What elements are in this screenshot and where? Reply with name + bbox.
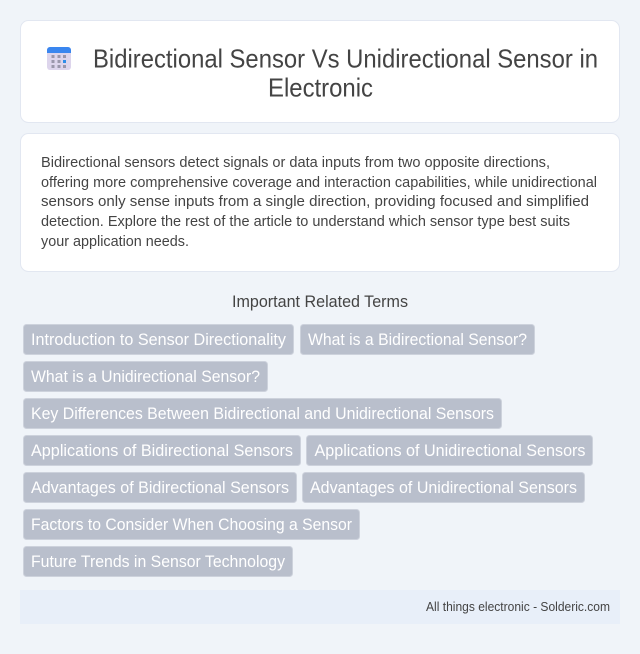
- heading: Electronic: [268, 72, 373, 102]
- tag: advantages bidirectional: Advantages of Bidirectional Sensors: [31, 478, 289, 497]
- tag: future trends: Future Trends in Sensor Technology: [31, 552, 285, 571]
- tag: what is unidirectional: [24, 362, 268, 392]
- tag: applications bidirectional: [24, 436, 300, 466]
- tag: key differences: Key Differences Between Bidirectional and Unidirectional Sensors: [31, 404, 494, 423]
- tag: what is bidirectional: What is a Bidirectional Sensor?: [308, 330, 527, 349]
- tag: applications unidirectional: [306, 436, 592, 466]
- tag: applications unidirectional: Applications of Unidirectional Sensors: [314, 441, 586, 460]
- panel: title header: [20, 20, 620, 122]
- panel: description: [20, 134, 620, 272]
- text block: description: Bidirectional sensors detect signals or data inputs from two opposite directions,: [41, 154, 550, 171]
- tag: what is bidirectional: [300, 324, 534, 354]
- tag: advantages unidirectional: Advantages of Unidirectional Sensors: [310, 478, 577, 497]
- text block: description: your application needs.: [41, 233, 189, 250]
- heading: important related terms: Important Related Terms: [232, 293, 408, 311]
- tag: applications bidirectional: Applications of Bidirectional Sensors: [31, 441, 293, 460]
- tag: future trends: [24, 546, 292, 576]
- tag: advantages bidirectional: [24, 472, 296, 502]
- tag: introduction: [24, 324, 294, 354]
- text block: description: offering more comprehensive coverage and interaction capabilities, while unidirectional: [41, 174, 597, 191]
- tag: what is unidirectional: What is a Unidirectional Sensor?: [31, 367, 260, 386]
- tag: factors: [24, 510, 360, 540]
- icon: calendar: [47, 47, 71, 70]
- text block: description: detection. Explore the rest of the article to understand which sensor type best suits: [41, 213, 570, 230]
- text block: description: [41, 154, 597, 250]
- footer: [20, 590, 620, 624]
- tag: key differences: [24, 398, 502, 428]
- tag: advantages unidirectional: [302, 472, 584, 502]
- footer: All things electronic - Solderic.com: [426, 600, 610, 614]
- heading: Bidirectional Sensor Vs Unidirectional Sensor in: [93, 44, 598, 74]
- tag: factors: Factors to Consider When Choosing a Sensor: [31, 515, 352, 534]
- tag: introduction: Introduction to Sensor Directionality: [31, 330, 286, 349]
- text block: description: sensors only sense inputs from a single direction, providing focused and simplified: [41, 193, 589, 210]
- heading: [93, 44, 598, 102]
